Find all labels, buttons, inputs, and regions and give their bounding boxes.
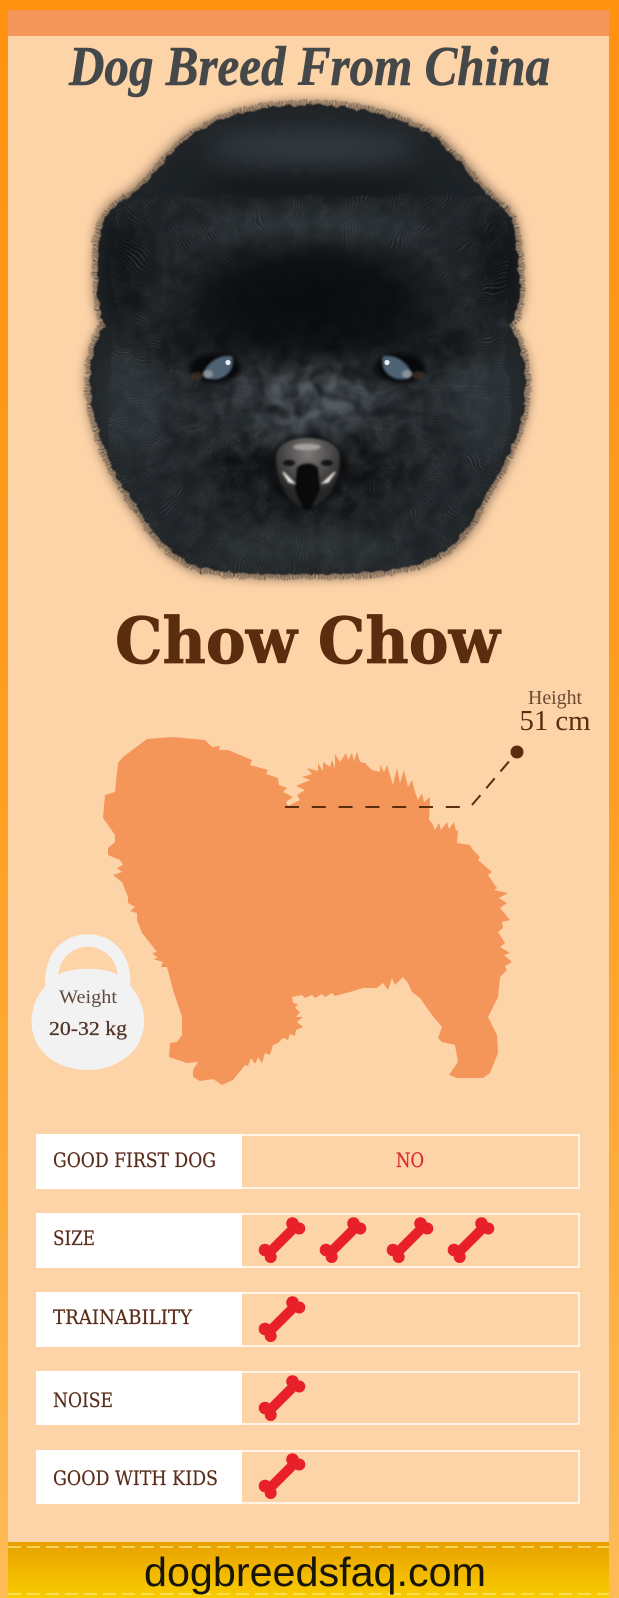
bone icon: [320, 1217, 366, 1263]
tonal fur shading: [99, 129, 517, 559]
height callout: [285, 687, 591, 807]
bone icon: [448, 1217, 494, 1263]
breed name: Chow Chow: [115, 604, 502, 679]
height value: 51 cm: [520, 706, 591, 737]
edge hairs: [92, 107, 523, 573]
rating row: good with kids: [36, 1450, 579, 1504]
dog silhouette: [103, 737, 512, 1085]
rating row: good with kids: GOOD WITH KIDS: [53, 1467, 218, 1490]
soft fur halo: [85, 100, 531, 580]
illustration: black chow chow face: [85, 100, 531, 580]
rating row: trainability: [36, 1292, 579, 1347]
fur mass: [90, 105, 525, 575]
bone icon: [259, 1375, 305, 1421]
weight kettlebell: [32, 934, 144, 1070]
eye: left: [189, 353, 241, 383]
bone icon: [259, 1217, 305, 1263]
bone icon: [259, 1453, 305, 1499]
nose: [265, 434, 349, 510]
height pointer: [285, 752, 517, 807]
rating row: good first dog: NO: [396, 1149, 424, 1172]
weight label: Weight: [59, 987, 118, 1008]
eye: right: [374, 353, 426, 383]
pointer dot: [510, 746, 524, 758]
footer band: [8, 1542, 609, 1598]
top band: [8, 10, 609, 36]
rating row: trainability: TRAINABILITY: [53, 1306, 193, 1329]
bone icon: [387, 1217, 433, 1263]
rating row: noise: NOISE: [53, 1389, 113, 1412]
rating row: noise: [36, 1371, 579, 1425]
bone icon: [259, 1296, 305, 1342]
title: Dog Breed From China: [68, 36, 550, 98]
rating row: good first dog: GOOD FIRST DOG: [53, 1149, 216, 1172]
kettlebell shape: [32, 934, 144, 1070]
rating row: size: SIZE: [53, 1227, 95, 1250]
weight value: 20-32 kg: [49, 1018, 127, 1040]
rating row: size: [36, 1213, 579, 1268]
dark brow shading: [167, 233, 446, 382]
website: dogbreedsfaq.com: [144, 1549, 486, 1595]
radial hair strands: [113, 195, 507, 578]
height label: Height: [528, 687, 582, 709]
rating row: good first dog: [36, 1134, 579, 1189]
